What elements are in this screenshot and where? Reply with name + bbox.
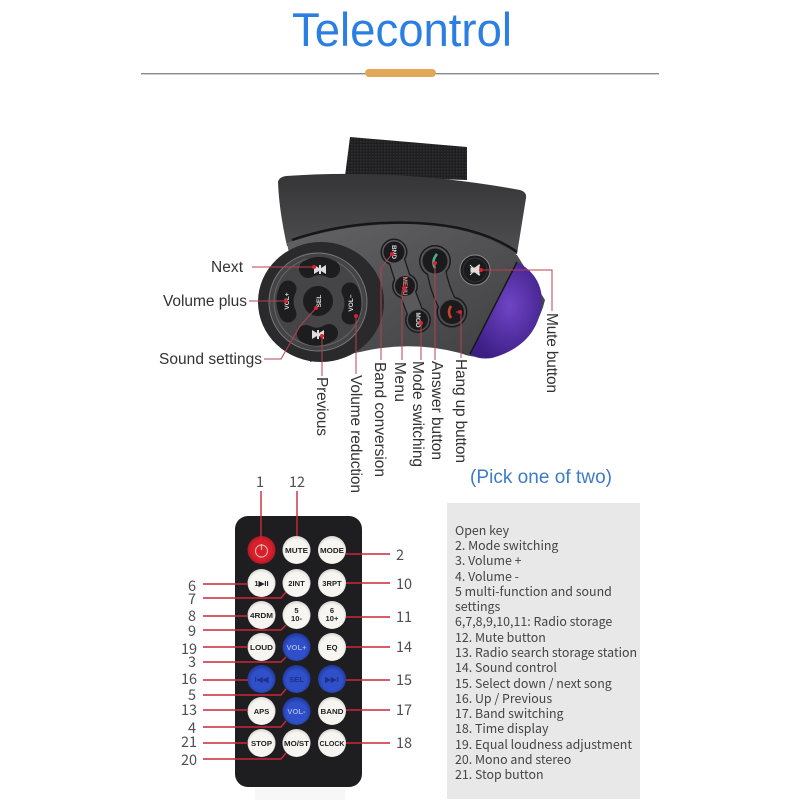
button legends: MUTE xyxy=(285,546,308,555)
remote callout numbers: 13 xyxy=(181,699,197,720)
button legends: CLOCK xyxy=(320,739,345,748)
button legends: LOUD xyxy=(250,643,274,652)
remote callout numbers: 1 xyxy=(256,471,264,492)
button legends: MO/ST xyxy=(284,739,309,748)
strap xyxy=(345,137,467,180)
button legends: 1▶II xyxy=(254,579,269,588)
power button xyxy=(248,536,276,564)
legend text: 21. Stop button xyxy=(455,765,544,783)
small buttons: MENU xyxy=(401,276,408,296)
legend text: 13. Radio search storage station xyxy=(455,643,637,661)
button legends: 3RPT xyxy=(322,579,342,588)
remote callout numbers: 2 xyxy=(396,544,404,565)
wheel remote labels: Sound settings xyxy=(159,351,262,368)
upper flap xyxy=(278,174,526,254)
legend text: 4. Volume - xyxy=(455,567,519,585)
button legends: BAND xyxy=(320,707,344,716)
title: Telecontrol xyxy=(292,3,512,56)
button legends: ▶▶I xyxy=(324,675,339,684)
remote callout numbers: 18 xyxy=(396,732,412,753)
legend text: Open key xyxy=(455,521,510,539)
control wheel xyxy=(258,242,384,362)
remote callout numbers: 20 xyxy=(181,749,197,770)
remote callout numbers: 4 xyxy=(188,717,196,738)
button legends: 10+ xyxy=(326,614,339,623)
remote callout numbers: 7 xyxy=(188,588,196,609)
legend text xyxy=(455,521,637,783)
remote callout numbers: 21 xyxy=(181,731,197,752)
legend text: settings xyxy=(455,597,501,615)
legend text: 6,7,8,9,10,11: Radio storage xyxy=(455,612,612,630)
button legends xyxy=(250,546,345,748)
remote shadow xyxy=(255,788,345,800)
legend text: 19. Equal loudness adjustment xyxy=(455,735,632,753)
small buttons xyxy=(380,238,490,333)
wheel remote labels: Mode switching xyxy=(409,361,426,467)
legend text: 16. Up / Previous xyxy=(455,689,552,707)
button legends: EQ xyxy=(327,643,338,652)
remote callout numbers: 17 xyxy=(396,699,412,720)
remote callout numbers: 5 xyxy=(188,684,196,705)
wheel remote labels xyxy=(159,259,560,493)
button legends: SEL xyxy=(289,675,304,684)
remote body xyxy=(235,516,362,787)
button legends: STOP xyxy=(251,739,272,748)
purple mute panel xyxy=(470,262,542,358)
wheel remote labels: Mute button xyxy=(543,313,560,393)
main body xyxy=(287,224,545,362)
legend text: 12. Mute button xyxy=(455,628,546,646)
panel: key legend xyxy=(447,503,640,799)
legend text: 20. Mono and stereo xyxy=(455,750,571,768)
title divider with orange pill xyxy=(141,69,659,77)
remote callout numbers: 9 xyxy=(188,620,196,641)
legend text: 14. Sound control xyxy=(455,658,557,676)
legend text: 5 multi-function and sound xyxy=(455,582,612,600)
white buttons xyxy=(248,536,346,757)
remote callout numbers: 6 xyxy=(188,575,196,596)
remote callout numbers: 8 xyxy=(188,605,196,626)
button legends: MODE xyxy=(320,546,344,555)
remote callout numbers: 14 xyxy=(396,636,412,657)
wheel remote labels: Hang up button xyxy=(452,359,469,463)
remote callout numbers: 16 xyxy=(181,668,197,689)
steering wheel remote photo xyxy=(258,137,545,362)
wheel remote labels: Band conversion xyxy=(371,362,388,477)
small buttons: BND xyxy=(390,245,397,259)
legend text: 18. Time display xyxy=(455,719,549,737)
button legends: 5 xyxy=(294,606,299,615)
pick one of two note: (Pick one of two) xyxy=(470,467,612,488)
button legends: APS xyxy=(254,707,269,716)
wheel remote labels: Volume reduction xyxy=(347,375,364,493)
remote callout numbers: 11 xyxy=(396,606,412,627)
remote callout numbers: 19 xyxy=(181,638,197,659)
button legends: VOL- xyxy=(287,707,306,716)
wheel remote labels: Menu xyxy=(391,362,408,402)
legend text: 2. Mode switching xyxy=(455,536,558,554)
control wheel: SEL xyxy=(316,295,323,307)
legend text: 3. Volume + xyxy=(455,551,522,569)
wheel remote labels: Volume plus xyxy=(163,293,247,310)
button legends: 4RDM xyxy=(250,611,273,620)
remote callout numbers: 15 xyxy=(396,669,412,690)
callout dots xyxy=(284,252,483,338)
legend text: 15. Select down / next song xyxy=(455,674,612,692)
callout lines for wheel remote xyxy=(249,254,552,376)
wheel remote labels: Answer button xyxy=(428,361,445,460)
remote callout numbers xyxy=(181,471,412,770)
button legends: 6 xyxy=(330,606,334,615)
remote callout numbers: 3 xyxy=(188,651,196,672)
wheel remote labels: Next xyxy=(211,259,244,276)
remote callout lines xyxy=(203,491,390,759)
remote callout numbers: 10 xyxy=(396,573,412,594)
button legends: VOL+ xyxy=(286,643,307,652)
blue buttons xyxy=(248,633,346,725)
legend text: 17. Band switching xyxy=(455,704,564,722)
remote callout numbers: 12 xyxy=(289,471,305,492)
button legends: I◀◀ xyxy=(255,675,270,684)
small buttons: MOD xyxy=(414,312,421,328)
infrared remote control xyxy=(235,516,362,800)
button legends: 2INT xyxy=(288,579,305,588)
button legends: 10- xyxy=(291,614,302,623)
wheel remote labels: Previous xyxy=(313,377,330,436)
control wheel: VOL+ xyxy=(284,292,291,310)
control wheel: VOL− xyxy=(348,294,355,312)
